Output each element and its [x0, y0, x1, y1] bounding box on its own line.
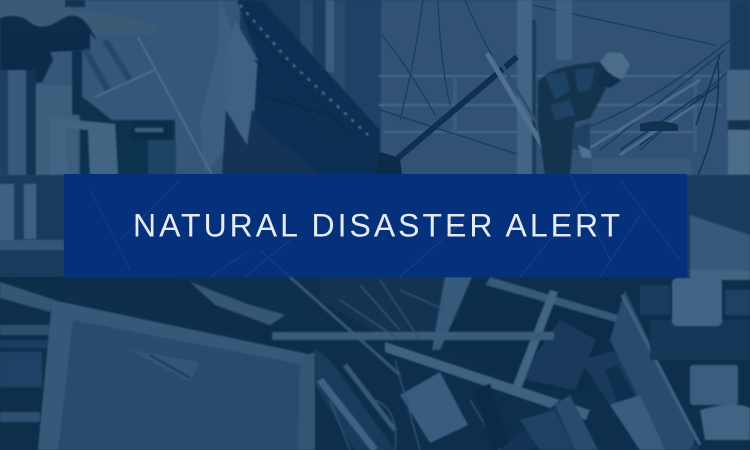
diagonal pipes	[488, 55, 568, 175]
right side pile: containers	[640, 270, 750, 440]
large white panel lower left	[38, 300, 315, 450]
background rails behind worker	[380, 0, 730, 155]
banner faint see-through debris	[90, 174, 680, 277]
sky and background wall	[0, 0, 750, 180]
wires on right	[620, 55, 720, 175]
diagonal beam	[398, 57, 517, 158]
dark lower wall under the roof	[222, 110, 380, 175]
worker	[538, 52, 630, 175]
shelving frames and debris	[185, 277, 700, 450]
utility poles	[517, 0, 750, 225]
title: NATURAL DISASTER ALERT	[133, 208, 620, 244]
bottom debris dark ground	[0, 277, 750, 450]
left posts and frames	[0, 37, 212, 245]
corrugated roof sheet	[237, 0, 380, 175]
debris beside banner	[0, 175, 750, 280]
awning top left	[0, 0, 158, 85]
banner panel	[64, 174, 687, 277]
